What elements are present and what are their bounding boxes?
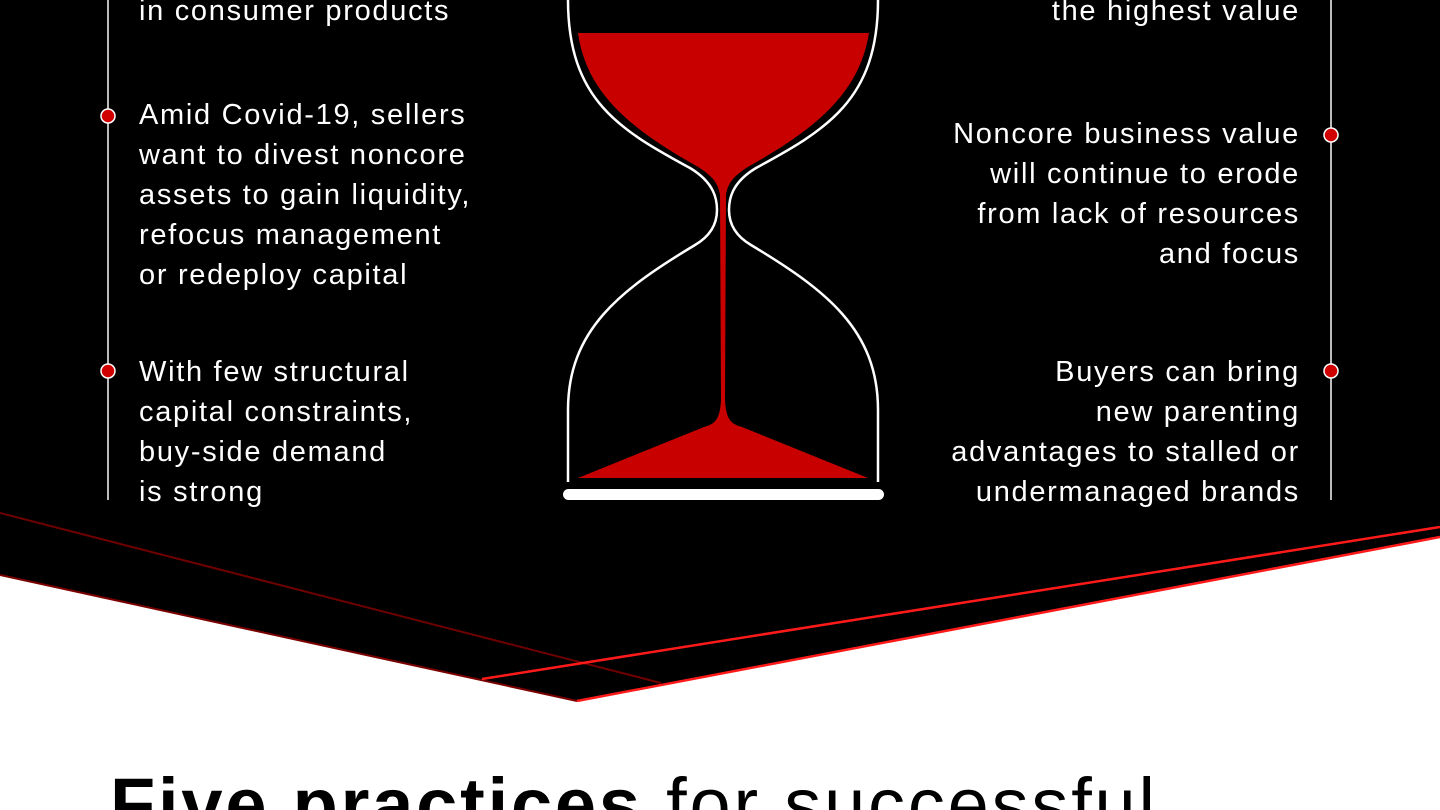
icon: right dot 2 — [1324, 364, 1338, 378]
text: right block 1: Noncore business value — [953, 118, 1300, 150]
text: left block 1: want to divest noncore — [138, 139, 467, 171]
text: right block 1: and focus — [1159, 238, 1300, 270]
icon: left dot 2 — [101, 364, 115, 378]
text: left block 1: or redeploy capital — [139, 259, 408, 291]
icon: left dot 1 — [101, 109, 115, 123]
text: right block 2: Buyers can bring — [1055, 356, 1300, 388]
left timeline — [101, 0, 115, 500]
text: right block 1: from lack of resources — [977, 198, 1300, 230]
icon: hourglass — [563, 0, 884, 500]
text: left block 1: refocus management — [139, 219, 442, 251]
text: left block 1: assets to gain liquidity, — [139, 179, 471, 211]
text: left block 2: capital constraints, — [139, 396, 413, 428]
text: left block 2: With few structural — [139, 356, 410, 388]
icon: right dot 1 — [1324, 128, 1338, 142]
text: right block 1: will continue to erode — [989, 158, 1300, 190]
text: left block 2: is strong — [139, 476, 264, 508]
text: right block 2: undermanaged brands — [976, 476, 1300, 508]
text: left block 2: buy-side demand — [139, 436, 387, 468]
right timeline — [1324, 0, 1338, 500]
text: left block 1: Amid Covid-19, sellers — [139, 99, 466, 131]
text: right block 2: new parenting — [1096, 396, 1300, 428]
text: right block 2: advantages to stalled or — [951, 436, 1300, 468]
